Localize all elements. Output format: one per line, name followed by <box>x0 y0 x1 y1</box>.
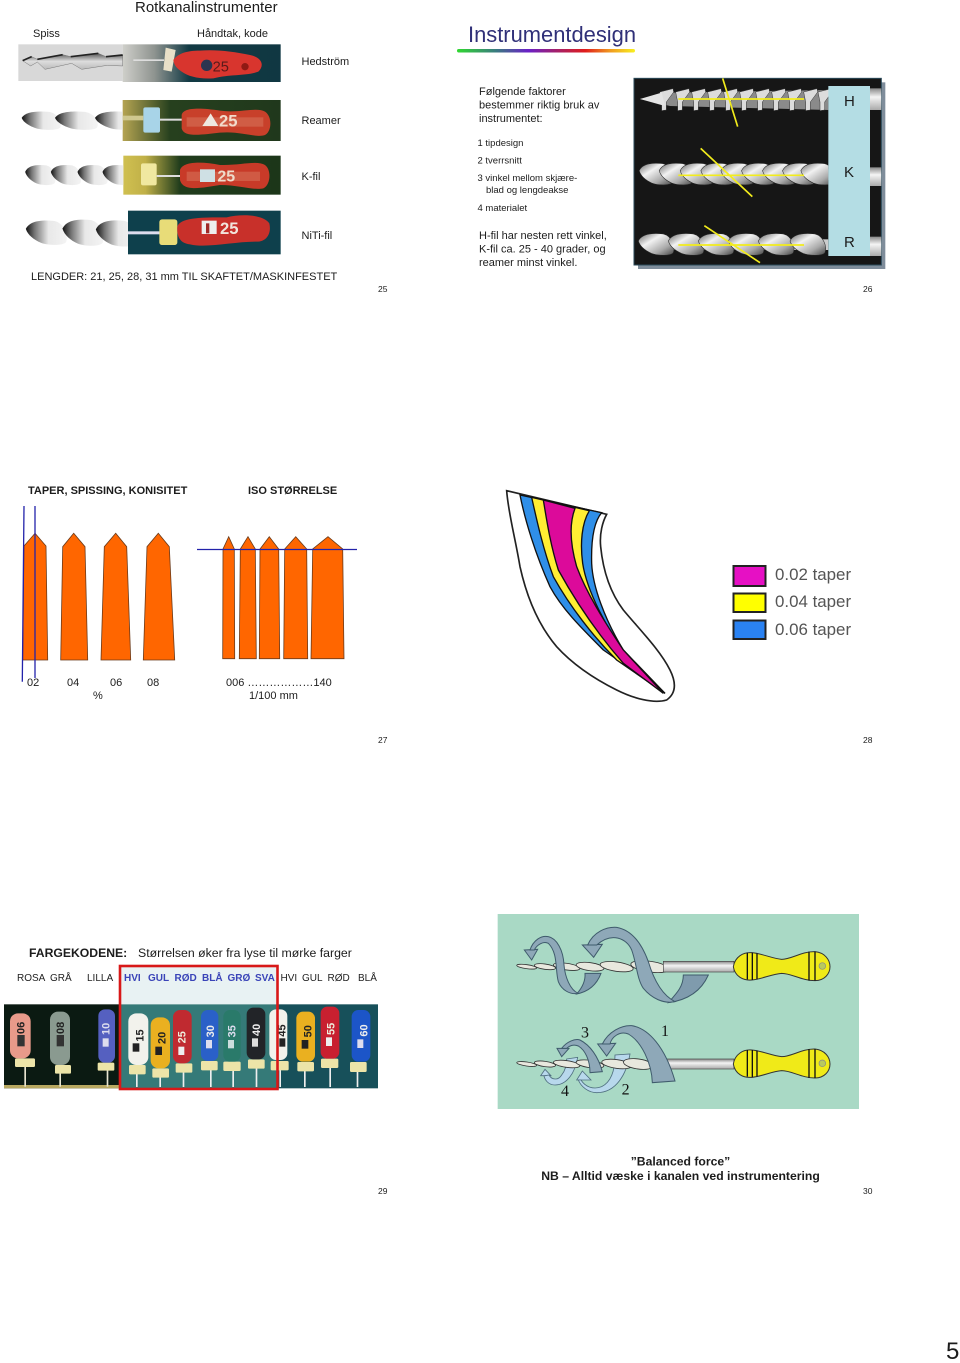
text: intro <box>479 86 600 125</box>
colour names: GUL <box>302 973 323 984</box>
instrument labels: K-fil <box>302 171 320 183</box>
legend item: 0.04 taper: 0.04 taper <box>775 592 851 611</box>
instrument: K-fil <box>25 156 281 195</box>
colour names: GRÅ <box>50 971 72 984</box>
page number 30: 30 <box>863 1186 873 1196</box>
step numbers: 1 <box>661 1023 669 1040</box>
reference lines: taper <box>22 506 35 682</box>
page number 28: 28 <box>863 735 873 745</box>
colour names: RØD <box>328 973 350 984</box>
label panel: H K R <box>828 86 870 256</box>
handle 45: 45 <box>277 1024 289 1037</box>
taper axis labels: 06 <box>110 677 122 689</box>
file labels: R <box>844 234 855 251</box>
list: factors <box>478 138 577 214</box>
colour names: HVI <box>124 973 141 984</box>
yellow angle lines <box>678 78 804 263</box>
panel: slide 25 root canal instruments <box>18 0 388 294</box>
taper axis labels: % <box>93 690 103 702</box>
legend item: 0.06 taper: 0.06 taper <box>775 620 851 639</box>
panel: slide 30 balanced force <box>498 914 873 1196</box>
handle 30: 30 <box>205 1025 217 1037</box>
handle 15: 15 <box>134 1029 146 1042</box>
ISO axis labels: 006 ………………140 <box>226 677 332 689</box>
handle 35 <box>223 1010 241 1087</box>
text: angle note <box>479 230 607 269</box>
instrument: K-fil: 25 <box>217 168 235 185</box>
photo: H K R files <box>634 78 885 269</box>
page number 29: 29 <box>378 1186 388 1196</box>
file labels <box>844 93 855 251</box>
handle 20 <box>151 1017 170 1087</box>
diagram: balanced force <box>498 914 859 1109</box>
handle 60: 60 <box>358 1024 370 1037</box>
list: factors: 4 materialet <box>478 203 527 214</box>
handle 20: 20 <box>156 1032 168 1044</box>
handle 55 <box>321 1007 339 1087</box>
handle 10 <box>98 1009 115 1087</box>
handle 08 <box>50 1012 71 1087</box>
rainbow rule <box>457 49 635 52</box>
column labels: Spiss <box>33 28 60 40</box>
text: intro: instrumentet: <box>479 113 543 125</box>
instrument labels: Reamer <box>302 115 341 127</box>
handle 35: 35 <box>226 1025 238 1037</box>
ISO axis labels <box>226 677 332 702</box>
handle 40: 40 <box>251 1024 263 1036</box>
rear ribbons lower <box>541 1054 630 1093</box>
caption: balanced force: ”Balanced force” <box>631 1154 730 1168</box>
handle 50 <box>296 1012 315 1087</box>
legend item: 0.02 taper: 0.02 taper <box>775 565 851 584</box>
handle 60 <box>350 1010 370 1087</box>
front ribbons upper <box>524 927 675 1002</box>
instrument: Reamer <box>22 100 281 141</box>
handle 55: 55 <box>326 1023 338 1035</box>
heading: taper: TAPER, SPISSING, KONISITET <box>28 485 188 497</box>
legend <box>734 565 851 639</box>
text: intro: bestemmer riktig bruk av <box>479 100 600 112</box>
column labels <box>33 28 268 40</box>
handle 10: 10 <box>100 1023 112 1035</box>
text: angle note: H-fil har nesten rett vinkel, <box>479 230 607 242</box>
colour names: LILLA <box>87 973 113 984</box>
panel: slide 29 colour codes <box>4 946 388 1196</box>
instrument labels: Hedström <box>302 56 349 68</box>
heading: ISO size: ISO STØRRELSE <box>248 485 337 497</box>
colour names: BLÅ <box>358 971 377 984</box>
page number 25: 25 <box>378 284 388 294</box>
colour names: GRØ <box>228 973 250 984</box>
photo: colour-coded handles <box>4 1004 378 1088</box>
colour names: BLÅ <box>202 971 223 984</box>
handle 45 <box>269 1009 289 1087</box>
text: intro: Følgende faktorer <box>479 86 566 98</box>
instrument labels: NiTi-fil <box>302 230 332 242</box>
step numbers: 4 <box>561 1083 569 1100</box>
heading: colour codes: FARGEKODENE: <box>29 946 127 960</box>
step numbers: 2 <box>622 1081 630 1098</box>
file labels: K <box>844 164 854 181</box>
text: angle note: reamer minst vinkel. <box>479 257 577 269</box>
reference line: ISO <box>197 548 357 550</box>
instrument labels <box>302 56 349 242</box>
file: R <box>638 233 828 255</box>
diagram: root canal <box>507 491 674 701</box>
chart: taper shapes <box>23 533 175 660</box>
list: factors: 1 tipdesign <box>478 138 523 149</box>
instrument photo strip <box>18 44 281 254</box>
instrument: Reamer: 25 <box>219 112 238 131</box>
handle 30 <box>201 1010 218 1087</box>
colour names: RØD <box>174 973 197 984</box>
colour names <box>17 971 377 984</box>
colour names: HVI <box>280 973 297 984</box>
handle 15 <box>128 1013 148 1087</box>
colour names: ROSA <box>17 973 46 984</box>
front ribbons lower <box>557 1026 675 1083</box>
taper axis labels: 08 <box>147 677 159 689</box>
instrument: Hedström <box>18 44 281 82</box>
text: size note: Størrelsen øker fra lyse til mørke farger <box>138 946 352 960</box>
handle 25: 25 <box>177 1031 189 1043</box>
text: angle note: K-fil ca. 25 - 40 grader, og <box>479 244 606 256</box>
colour names: SVA <box>255 973 275 984</box>
handle 25 <box>173 1010 192 1087</box>
ISO axis labels: 1/100 mm <box>249 690 298 702</box>
instrument upper <box>516 952 830 981</box>
file labels: H <box>844 93 855 110</box>
instrument: NiTi-fil <box>26 211 281 254</box>
step numbers <box>561 1023 669 1100</box>
file shanks <box>870 88 881 256</box>
rear ribbons upper <box>577 973 708 1003</box>
column labels: Håndtak, kode <box>197 28 268 40</box>
file: K <box>639 163 835 185</box>
page number 26: 26 <box>863 284 873 294</box>
instrument: NiTi-fil: 25 <box>220 219 239 238</box>
handle 08: 08 <box>55 1022 67 1034</box>
heading: Instrumentdesign: Instrumentdesign <box>468 22 636 47</box>
taper axis labels: 02 <box>27 677 39 689</box>
list: factors: blad og lengdeakse <box>486 185 568 196</box>
handle 06 <box>10 1013 35 1087</box>
handle 50: 50 <box>302 1025 314 1037</box>
instrument: Hedström: 25 <box>213 60 229 76</box>
highlight background <box>120 966 277 1004</box>
instrument lower <box>516 1049 830 1078</box>
handle 06: 06 <box>16 1022 28 1034</box>
step numbers: 3 <box>581 1024 589 1041</box>
taper axis labels <box>27 677 159 702</box>
caption: balanced force <box>541 1154 820 1183</box>
panel: slide 26 instrument design <box>457 22 885 294</box>
panel: slide 27 taper and ISO size <box>22 485 388 745</box>
colour names: GUL <box>148 973 169 984</box>
list: factors: 2 tverrsnitt <box>478 156 522 166</box>
handle 40 <box>247 1008 265 1087</box>
caption: balanced force: NB – Alltid væske i kanalen ved instrumentering <box>541 1169 820 1183</box>
panel: slide 28 canal taper diagram <box>507 491 873 745</box>
page number 27: 27 <box>378 735 388 745</box>
chart: ISO shapes <box>223 537 344 659</box>
text: lengths: LENGDER: 21, 25, 28, 31 mm TIL SKAFTET/MASKINFESTET <box>31 271 338 283</box>
list: factors: 3 vinkel mellom skjære- <box>478 173 577 184</box>
file: H <box>640 89 832 111</box>
taper axis labels: 04 <box>67 677 79 689</box>
highlight frame <box>120 966 278 1089</box>
